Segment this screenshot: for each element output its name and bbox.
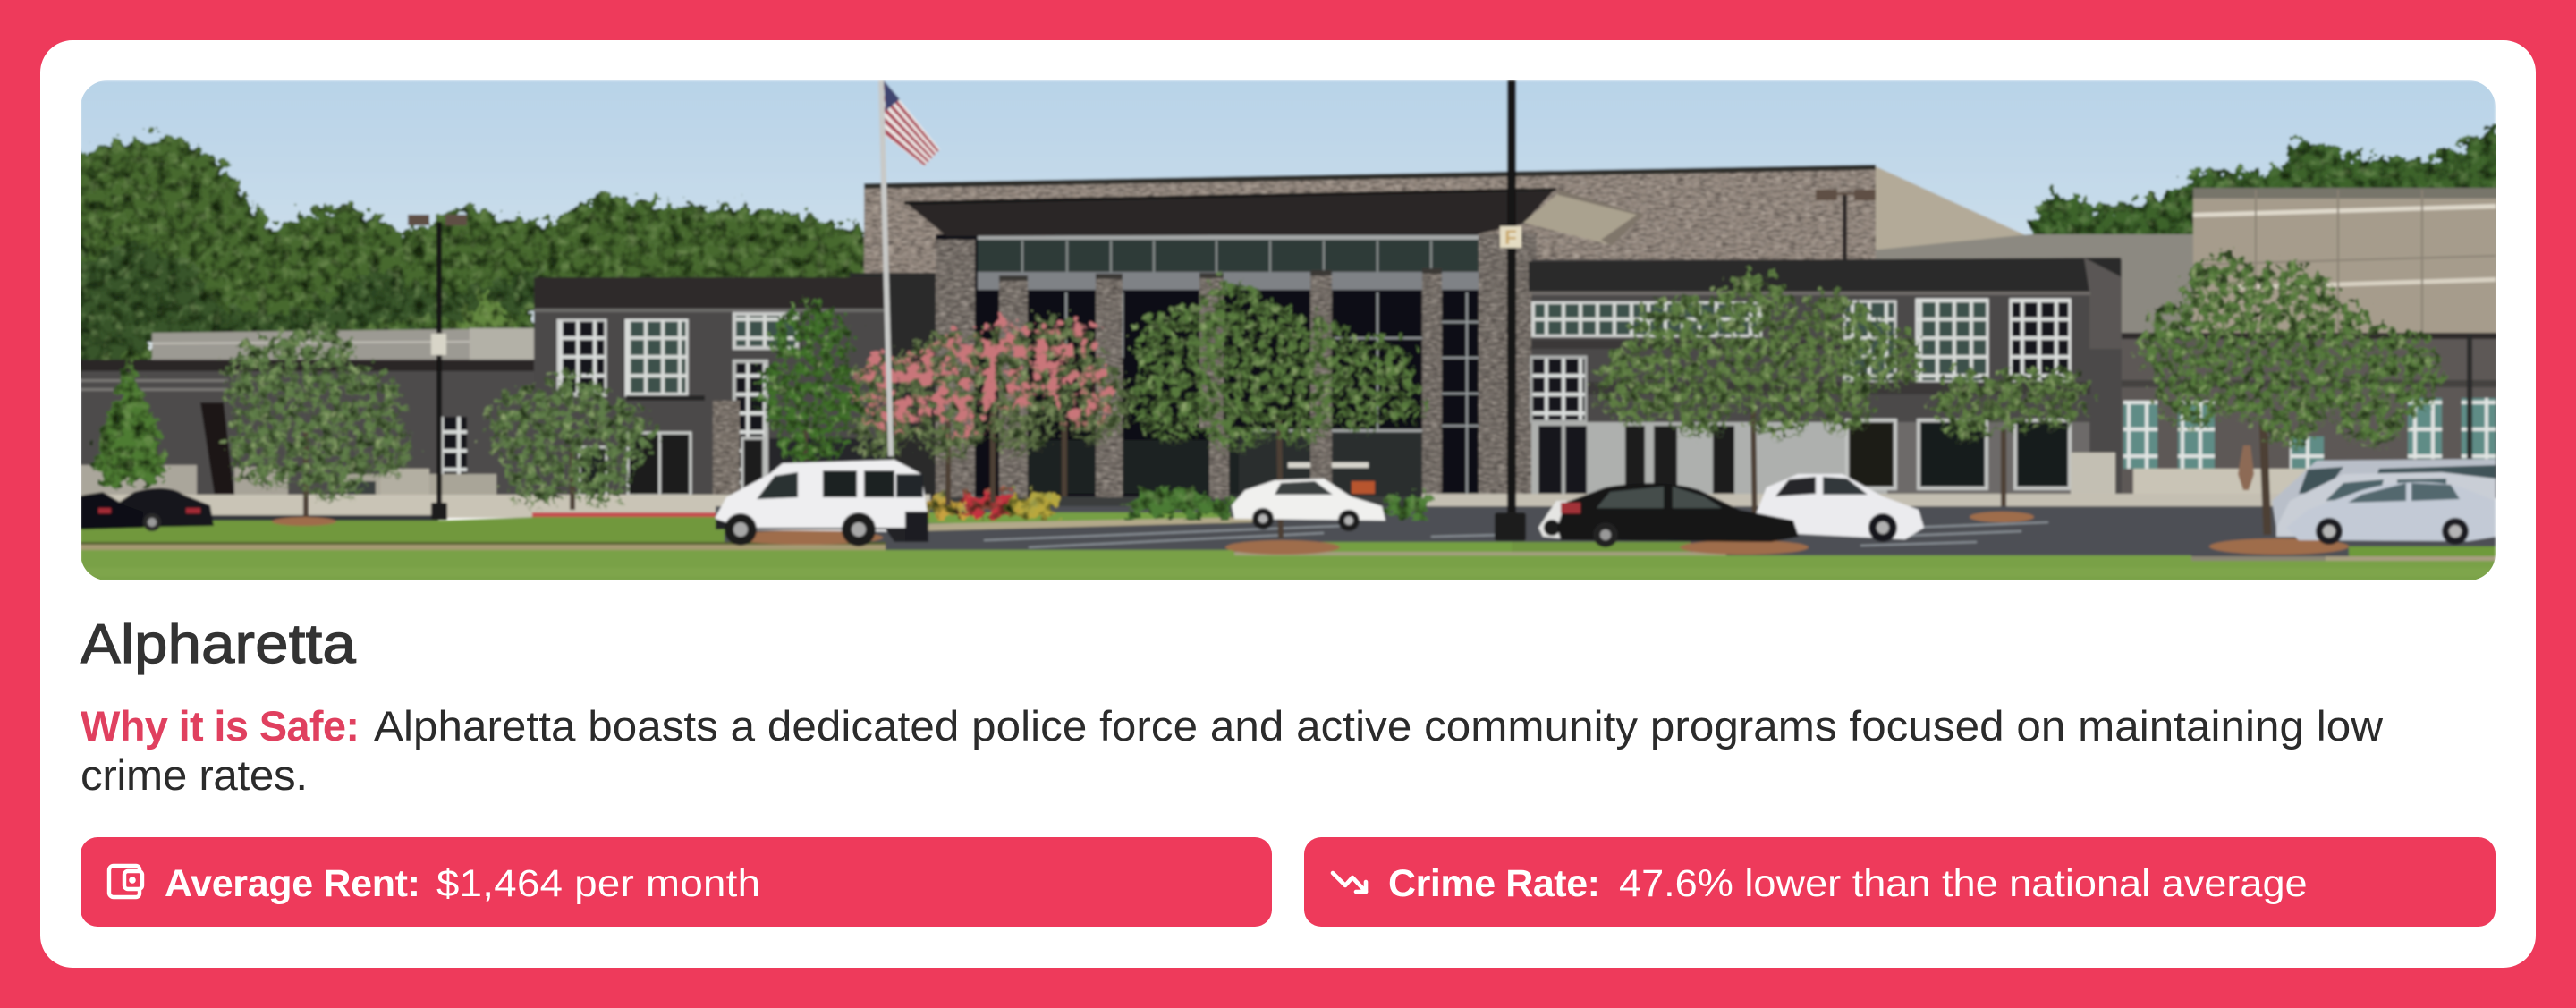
lamp post, center: F bbox=[1504, 226, 1517, 249]
tree: near flagpole bbox=[758, 304, 863, 470]
cars: black sedans, left bbox=[80, 488, 214, 531]
trees behind building, right bbox=[2025, 122, 2496, 236]
tree: conifer, left bbox=[94, 358, 166, 484]
label: crime rate: Crime Rate: bbox=[1388, 862, 1600, 905]
text block: why it is safe bbox=[80, 702, 2383, 800]
stone columns bbox=[936, 233, 1537, 499]
left two-story wing bbox=[534, 277, 890, 499]
icon: trending down arrow bbox=[1333, 873, 1366, 892]
flagpole bbox=[881, 80, 891, 456]
tree: center bbox=[1131, 282, 1422, 452]
icon: wallet bbox=[109, 866, 142, 897]
label: why it is safe: Why it is Safe: bbox=[80, 702, 360, 750]
dark low wing, far right bbox=[2089, 333, 2497, 503]
central glass curtain wall bbox=[850, 234, 1481, 510]
pedestrian bbox=[2238, 445, 2254, 490]
lamp post, center bbox=[1495, 80, 1526, 541]
label: average rent: Average Rent: bbox=[165, 862, 420, 905]
left low building bbox=[80, 328, 537, 496]
lamp post, left bbox=[408, 215, 467, 520]
mulch mounds bbox=[272, 512, 2349, 555]
car: black sedan bbox=[1538, 483, 1799, 547]
photo: Alpharetta building bbox=[63, 80, 2513, 581]
car: white SUV bbox=[716, 460, 928, 546]
ground: sidewalks, curbs and lawn bbox=[80, 494, 2496, 581]
trees: crape myrtle blossoms bbox=[852, 321, 1114, 443]
heading: Alpharetta: Alpharetta bbox=[80, 613, 356, 674]
entrance canopy bbox=[904, 188, 1644, 246]
description line 2: crime rates. bbox=[80, 752, 308, 800]
rear low roof bbox=[1869, 234, 2197, 358]
car: white sedan bbox=[1232, 479, 1385, 531]
lamp post, right rear bbox=[1815, 188, 1877, 261]
car: white SUV, right bbox=[1756, 474, 1924, 542]
value: crime rate: 47.6% lower than the national average bbox=[1619, 862, 2308, 905]
description line 1: Alpharetta boasts a dedicated police force and active community programs focused on maintaining low bbox=[374, 703, 2383, 750]
gym wall, right rear bbox=[1873, 165, 2025, 251]
trees behind building, left bbox=[63, 134, 886, 376]
tan building, far right bbox=[2193, 188, 2497, 335]
flower beds and hedge bbox=[927, 487, 1428, 519]
right two-story wing bbox=[1529, 258, 2122, 498]
stat pill: crime rate bbox=[1304, 837, 2496, 927]
column caps bbox=[999, 268, 1442, 281]
tree: right wing bbox=[1597, 273, 2088, 441]
value: rent: $1,464 per month bbox=[436, 862, 760, 905]
stat pill: average rent bbox=[80, 837, 1272, 927]
trees: crape myrtle foliage bbox=[850, 318, 1131, 461]
cars: silver vans and sedan bbox=[2272, 459, 2496, 545]
trees: trunks bbox=[306, 411, 2267, 538]
pill background bbox=[80, 837, 1272, 927]
flag bbox=[884, 80, 940, 166]
pill background bbox=[1304, 837, 2496, 927]
sky bbox=[80, 80, 2496, 349]
tree: left landscaping bbox=[224, 324, 653, 506]
stone upper wall bbox=[864, 166, 1876, 277]
tree: far right bbox=[2140, 255, 2442, 447]
